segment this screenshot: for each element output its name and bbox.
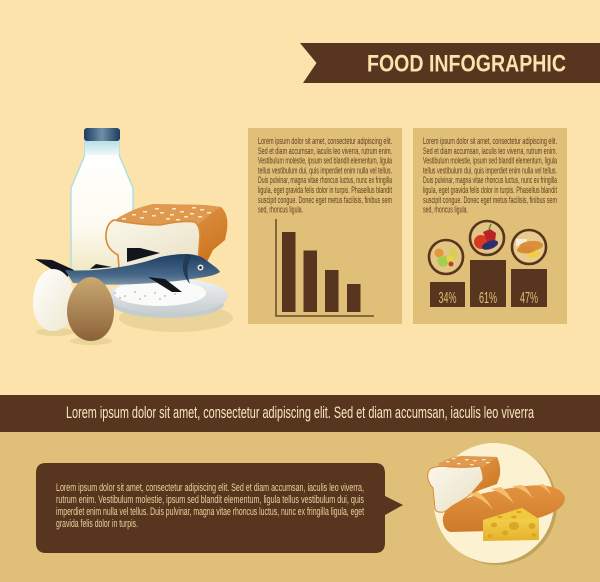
icon: baguette [443, 484, 565, 532]
panel text: Sed et diam accumsan, iaculis leo viverra, rutrum enim. [258, 146, 392, 157]
icon: milk bottle [71, 128, 133, 272]
bar: 34% [430, 282, 465, 307]
bread and cheese illustration [428, 443, 565, 565]
callout text: Lorem ipsum dolor sit amet, consectetur adipiscing elit. Sed et diam accumsan, iaculis leo viverra, [56, 482, 364, 494]
plate shadow [119, 304, 233, 332]
panel text: sed, rhoncus ligula. [258, 205, 303, 216]
callout text: gravida felis dolor in turpis. [56, 518, 138, 530]
lower section background [0, 432, 600, 582]
panel text: ligula, eget gravida felis dolor in turpis. Phasellus blandit [258, 185, 392, 196]
bar: 61%: 61% [479, 290, 497, 307]
icon: white egg [33, 269, 74, 336]
bar chart [276, 219, 374, 316]
icon: bread loaf [428, 456, 500, 512]
icon: brown egg [67, 277, 114, 345]
icon: fish [35, 248, 220, 300]
title ribbon [300, 43, 600, 83]
panel text: Duis pulvinar, magna vitae rhoncus luctus, nunc ex fringilla [258, 175, 392, 186]
panel text [258, 136, 392, 216]
panel: text with percentages [413, 128, 567, 324]
icon: cheese [483, 508, 539, 541]
bar: 34%: 34% [438, 290, 457, 307]
panel text: tellus vestibulum dui, quis imperdiet enim nulla vel tellus. [258, 165, 392, 176]
callout text: rutrum enim. Vestibulum molestie, ipsum sed blandit elementum, ligula tellus vestibulum dui, quis [56, 494, 364, 506]
panel text [423, 136, 557, 216]
icon: bread and cheese circle [512, 230, 546, 264]
food illustration: milk, bread, fish, eggs [33, 128, 233, 345]
banner band [0, 395, 600, 432]
icon: vegetables circle [470, 221, 504, 255]
callout speech bubble [36, 463, 403, 553]
panel: text with bar chart [248, 128, 402, 324]
callout text: imperdiet enim nulla vel tellus. Duis pulvinar, magna vitae rhoncus luctus, nunc ex fringilla ligula, eget [56, 506, 364, 518]
icon: fruit circle [429, 240, 463, 274]
panel text: Vestibulum molestie, ipsum sed blandit elementum, ligula [258, 156, 392, 167]
panel text: suscipit congue. Donec eget metus facilisis, finibus sem [258, 195, 392, 206]
icon: plate [108, 278, 228, 318]
bar: 47% [511, 269, 547, 307]
panel text: Lorem ipsum dolor sit amet, consectetur adipiscing elit. [258, 136, 392, 147]
callout text [56, 482, 364, 530]
bar: 61% [470, 260, 506, 307]
panel text: sed, rhoncus ligula. [423, 205, 468, 216]
icon: bread loaf [106, 204, 227, 268]
bar: 47%: 47% [520, 290, 538, 307]
